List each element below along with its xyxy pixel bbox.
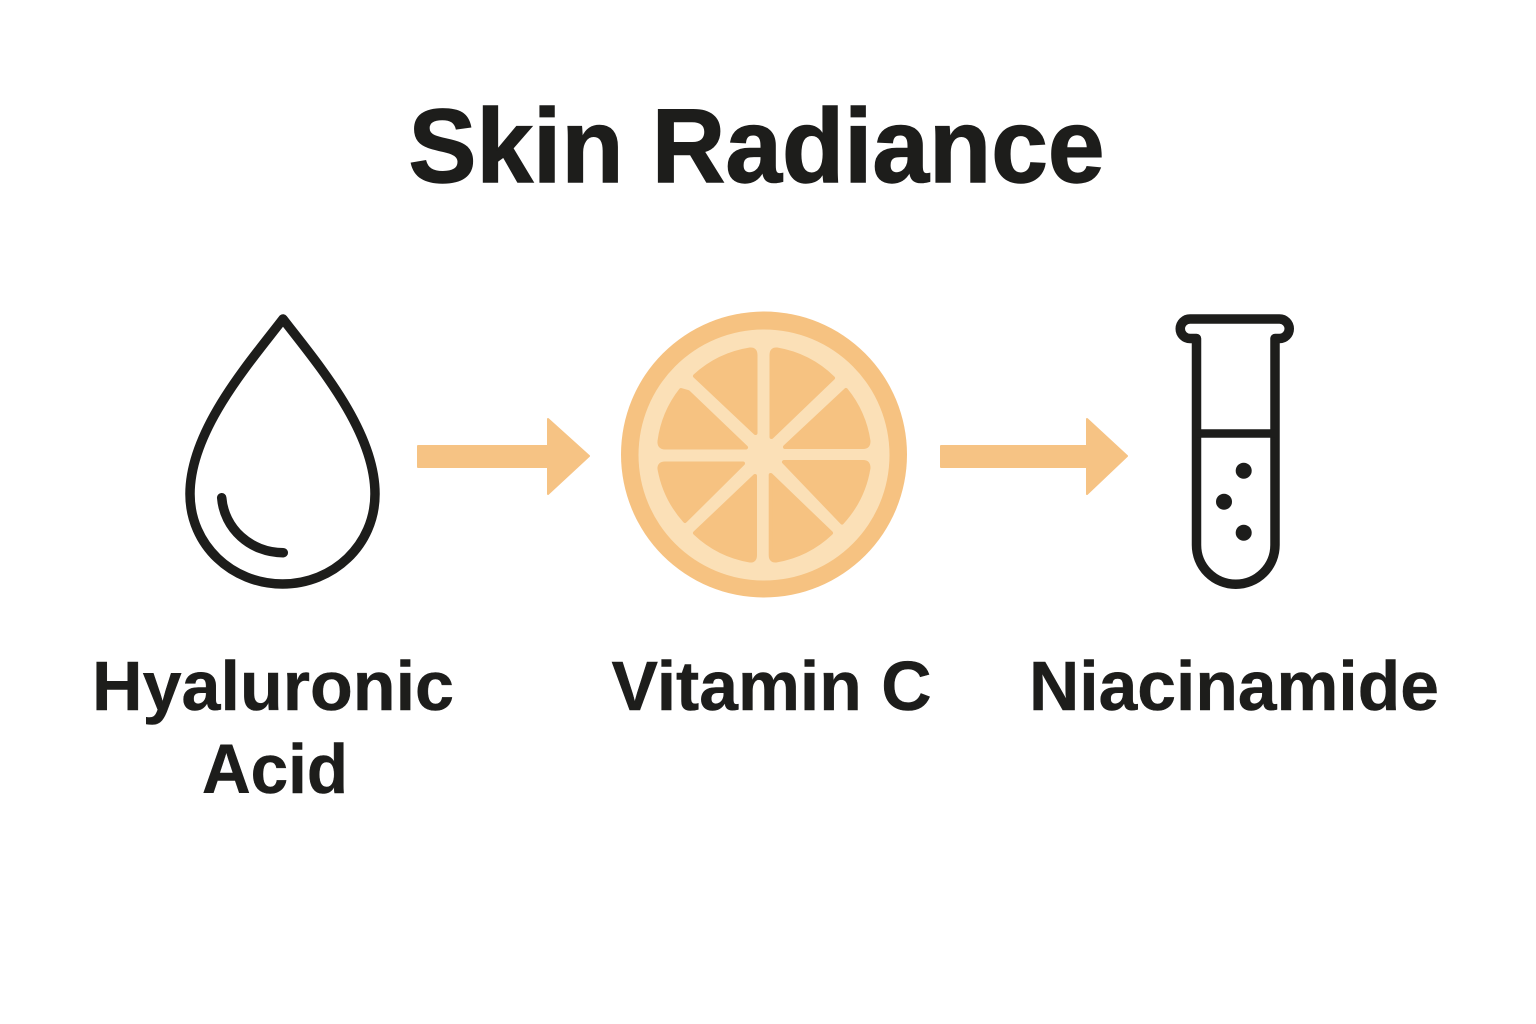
icon: water drop (190, 319, 375, 584)
label: Hyaluronic Acid: Acid (202, 730, 348, 808)
label: Hyaluronic Acid (92, 647, 454, 808)
label: Niacinamide: Niacinamide (1029, 647, 1439, 725)
arrow: orange to test tube (941, 419, 1127, 494)
icon: orange slice (621, 312, 907, 598)
label: Vitamin C: Vitamin C (612, 647, 932, 725)
title: Skin Radiance (408, 88, 1104, 205)
label: Hyaluronic Acid: Hyaluronic (92, 647, 454, 725)
arrow: drop to orange (418, 419, 589, 494)
icon: test tube (1180, 319, 1289, 584)
